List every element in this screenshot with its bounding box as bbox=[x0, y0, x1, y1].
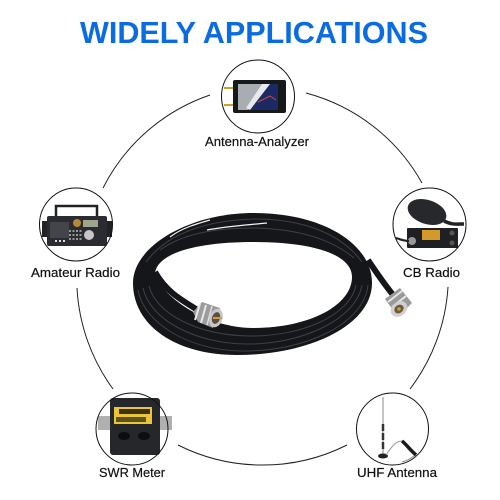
right cable tail bbox=[368, 260, 394, 296]
item: Amateur Radio bbox=[31, 188, 120, 280]
icon: antenna analyzer bbox=[222, 60, 294, 133]
icon: CB radio bbox=[393, 188, 466, 261]
icon: UHF antenna bbox=[356, 393, 428, 465]
label: SWR Meter bbox=[99, 465, 166, 480]
cable highlights bbox=[138, 219, 368, 351]
cable coil bbox=[133, 213, 372, 355]
left cable tail bbox=[155, 272, 196, 309]
item: CB Radio bbox=[393, 188, 466, 280]
item: Antenna-Analyzer bbox=[205, 60, 310, 149]
white gaps between cable turns bbox=[170, 220, 267, 237]
label: Antenna-Analyzer bbox=[205, 134, 310, 149]
title: WIDELY APPLICATIONS bbox=[80, 16, 428, 50]
label: UHF Antenna bbox=[357, 465, 438, 480]
item: UHF Antenna bbox=[356, 393, 438, 480]
item: SWR Meter bbox=[96, 393, 172, 480]
right connector bbox=[385, 288, 412, 320]
icon: SWR meter bbox=[96, 393, 172, 465]
icon: amateur radio bbox=[40, 188, 112, 261]
connecting ring arcs bbox=[77, 93, 448, 465]
central coaxial cable bbox=[133, 213, 412, 355]
label: CB Radio bbox=[403, 265, 460, 280]
label: Amateur Radio bbox=[31, 265, 120, 280]
left connector bbox=[193, 302, 225, 329]
